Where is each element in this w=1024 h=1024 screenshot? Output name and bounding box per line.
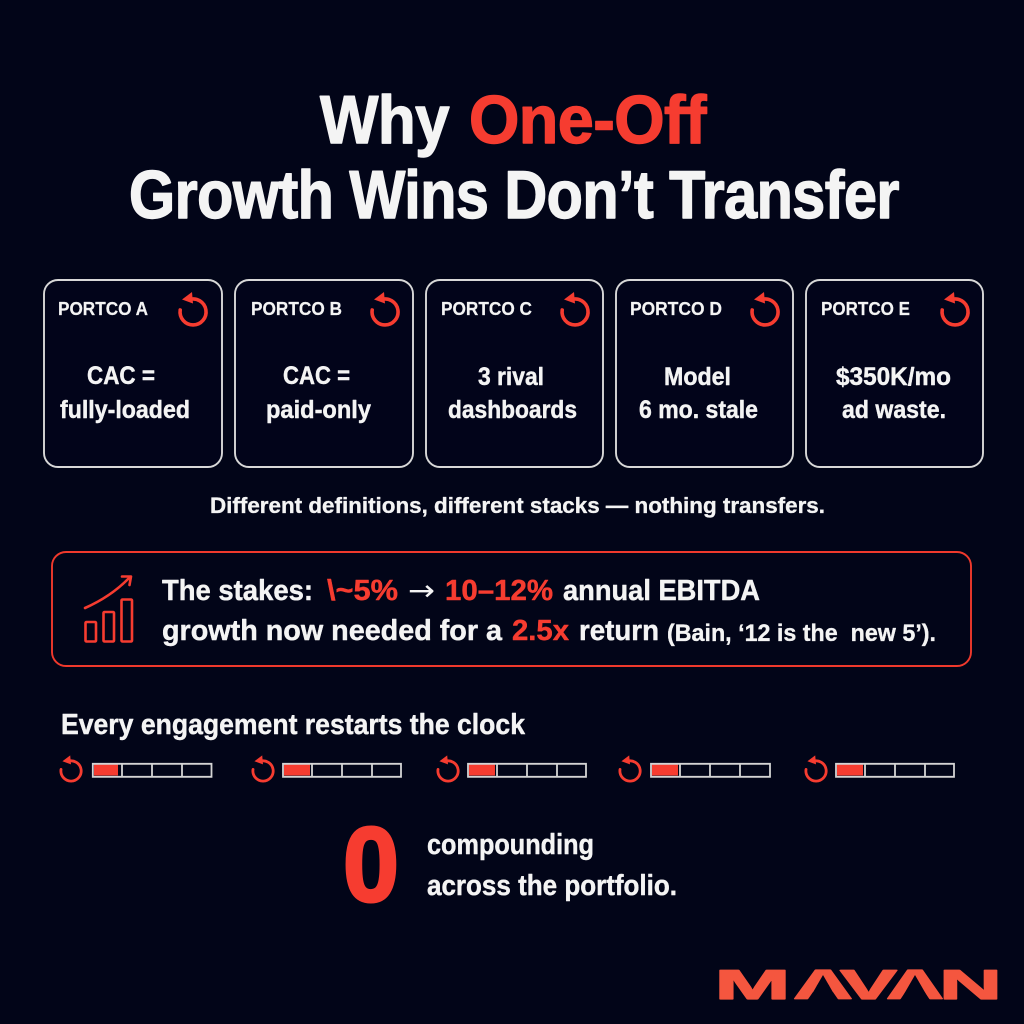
panel: Portco E: PORTCO E <box>821 298 910 319</box>
text: stakes line 1: → <box>408 574 435 607</box>
progress row 4 <box>620 755 770 781</box>
text: stakes line 1: 10–12% <box>445 575 553 607</box>
icon: growth chart <box>85 576 132 642</box>
panel: Portco D: Model <box>664 363 731 391</box>
panel: Portco A: CAC = <box>87 362 155 390</box>
big zero: 0 <box>343 806 399 924</box>
title <box>129 82 899 233</box>
title: One-Off <box>469 82 707 158</box>
panel: Portco B <box>235 280 413 467</box>
panel: Portco A <box>44 280 222 467</box>
panel: Portco B: CAC = <box>283 362 350 390</box>
panel: Portco D <box>616 280 793 467</box>
title: Why <box>320 82 450 158</box>
text: stakes line 2: return <box>579 615 659 647</box>
heading: every engagement: Every engagement restarts the clock <box>61 709 525 741</box>
text: compounding <box>427 829 677 902</box>
panel: Portco E <box>806 280 983 467</box>
panel: Portco C: 3 rival <box>478 363 544 391</box>
text: stakes line 2: growth now needed for a <box>162 615 503 647</box>
logo: MAVAN: N <box>939 961 1002 1008</box>
text: stakes line 2 <box>162 615 936 647</box>
logo: MAVAN: M <box>714 961 790 1008</box>
progress row 5 <box>806 755 954 781</box>
logo: MAVAN: V <box>840 961 897 1008</box>
title: Growth Wins Don’t Transfer <box>129 157 899 233</box>
text: stakes line 2: 2.5x <box>512 615 569 647</box>
panel: Portco E: $350K/mo <box>836 363 951 391</box>
caption: Different definitions, different stacks — nothing transfers. <box>210 493 825 518</box>
panel: Portco C: dashboards <box>448 396 577 424</box>
panel: Portco D: 6 mo. stale <box>639 396 758 424</box>
panel: the stakes <box>52 552 971 666</box>
logo: MAVAN: A <box>886 961 944 1008</box>
panel: Portco A: PORTCO A <box>58 298 148 319</box>
text: stakes line 1: \~5% <box>327 575 398 607</box>
text: stakes line 1 <box>162 574 760 607</box>
panel: Portco B: paid-only <box>266 396 371 424</box>
panel: Portco E: ad waste. <box>842 396 946 424</box>
progress row 3 <box>438 755 586 781</box>
panel: Portco A: fully-loaded <box>60 396 190 424</box>
text: compounding: compounding <box>427 829 594 861</box>
progress row 2 <box>253 755 401 781</box>
text: compounding: across the portfolio. <box>427 870 677 902</box>
text: stakes line 2: (Bain, ‘12 is the new 5’). <box>667 620 936 647</box>
panel: Portco D: PORTCO D <box>630 298 722 319</box>
logo: MAVAN <box>714 961 1002 1008</box>
panel: Portco C: PORTCO C <box>441 298 532 319</box>
panel: Portco B: PORTCO B <box>251 298 342 319</box>
panel: Portco C <box>426 280 603 467</box>
text: stakes line 1: annual EBITDA <box>563 575 760 607</box>
text: stakes line 1: The stakes: <box>162 575 313 607</box>
logo: MAVAN: A <box>793 961 853 1008</box>
progress row 1 <box>61 755 212 781</box>
